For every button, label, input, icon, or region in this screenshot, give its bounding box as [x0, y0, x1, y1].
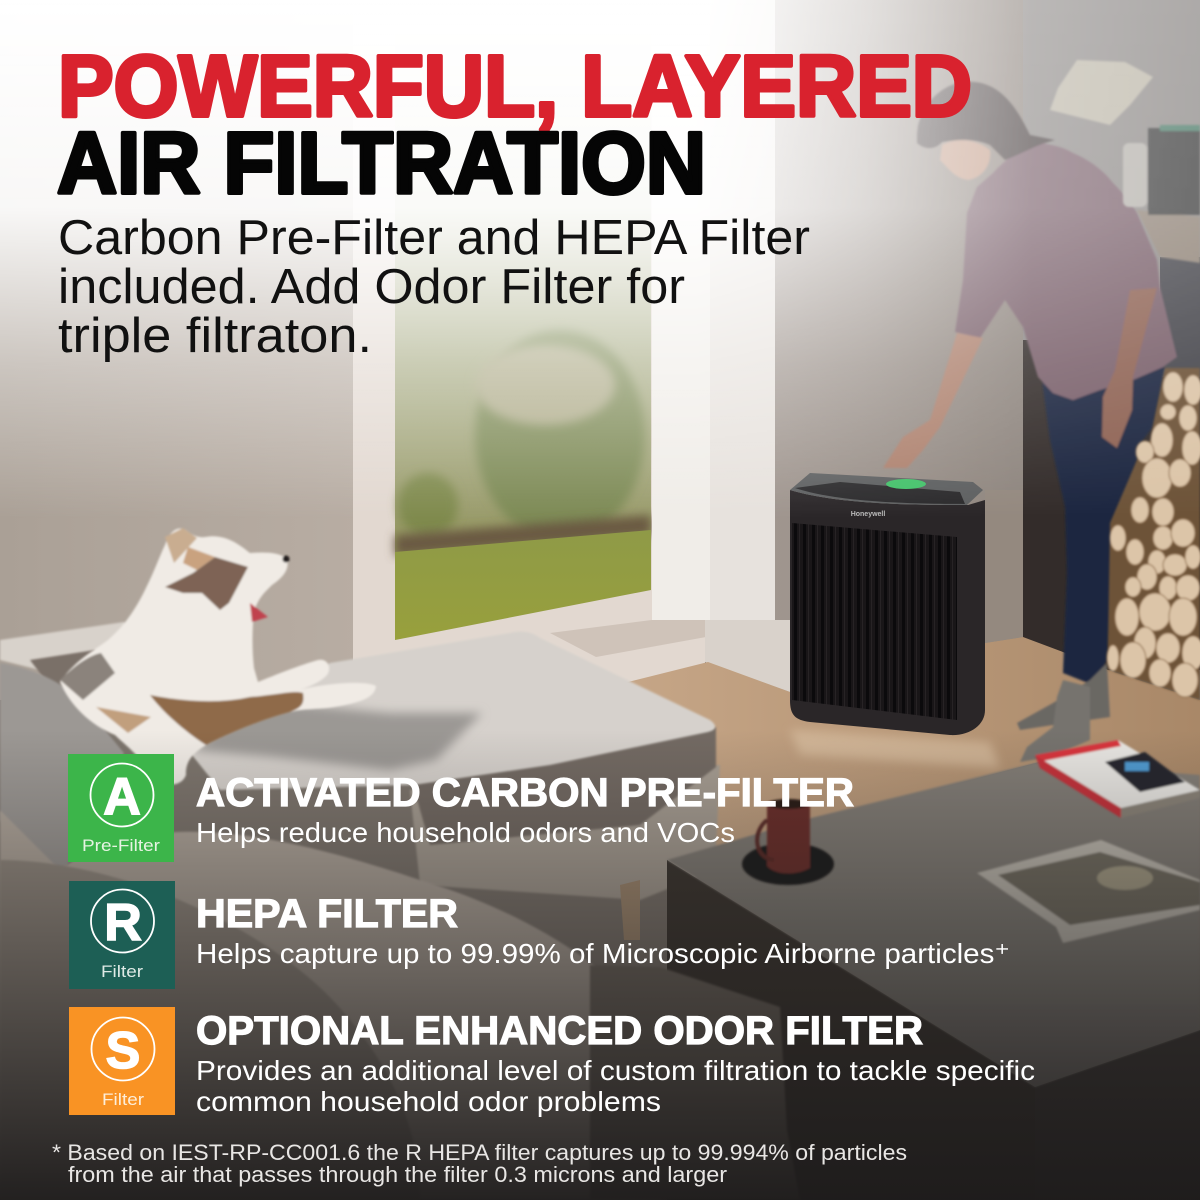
badge R: R: [104, 894, 142, 952]
title: [57, 38, 972, 212]
filter A row: [68, 754, 854, 862]
left pillow: [0, 663, 124, 880]
sofa and ottoman: [0, 622, 720, 1200]
heading R: HEPA FILTER: [196, 892, 458, 936]
coffee table: [590, 762, 1200, 1200]
mug and saucer: [742, 799, 834, 885]
heading A: ACTIVATED CARBON PRE-FILTER: [196, 771, 854, 815]
badge S: Filter: [102, 1090, 144, 1109]
badge A: A: [103, 768, 141, 826]
window and garden: [353, 0, 706, 700]
filter S row: [69, 1007, 1035, 1117]
hair: [917, 82, 1055, 160]
description S: [196, 1055, 1035, 1117]
footnote: * Based on IEST-RP-CC001.6 the R HEPA filter captures up to 99.994% of particles: [52, 1140, 907, 1165]
description A: Helps reduce household odors and VOCs: [196, 817, 735, 848]
footnote: [52, 1140, 907, 1187]
blanket: [0, 810, 660, 1200]
dog shadow: [193, 700, 482, 770]
wood floor: [620, 490, 1200, 860]
subtitle text: [58, 211, 810, 363]
badge S: S: [106, 1022, 140, 1080]
footnote: from the air that passes through the filter 0.3 microns and larger: [68, 1162, 727, 1187]
face: [940, 140, 990, 180]
ottoman top: [188, 632, 715, 790]
sweater: [955, 143, 1177, 400]
bottom dark fade: [0, 730, 1200, 1200]
ottoman side: [413, 727, 716, 845]
title: POWERFUL, LAYERED: [58, 38, 972, 135]
badge R: [69, 881, 175, 989]
dog: [60, 528, 376, 784]
subtitle text: Carbon Pre-Filter and HEPA Filter: [58, 211, 810, 265]
badge A: Pre-Filter: [82, 836, 160, 855]
red filter box on table: [1035, 740, 1200, 818]
main sofa seat: [410, 765, 720, 900]
subtitle text: triple filtraton.: [58, 309, 372, 363]
subtitle text: included. Add Odor Filter for: [58, 260, 685, 314]
badge S: [69, 1007, 175, 1115]
shelf decor: [1050, 60, 1200, 263]
air purifier: [790, 473, 985, 735]
air purifier: Honeywell: [851, 511, 885, 518]
magazine on table: [977, 840, 1200, 943]
description R: Helps capture up to 99.99% of Microscopic Airborne particles⁺: [196, 938, 1010, 969]
badge A: [68, 754, 174, 862]
back cushion: [0, 622, 160, 670]
socks: [1017, 663, 1110, 730]
title: AIR FILTRATION: [57, 115, 706, 212]
arms: [883, 333, 983, 468]
description S: common household odor problems: [196, 1086, 661, 1117]
woman: [883, 82, 1177, 762]
log pile: [1107, 368, 1200, 700]
legs: [1042, 367, 1165, 685]
filter R row: [69, 881, 1010, 989]
badge R: Filter: [101, 962, 143, 981]
heading S: OPTIONAL ENHANCED ODOR FILTER: [196, 1009, 923, 1053]
wall pillar: [652, 0, 790, 692]
top white fade: [0, 0, 1200, 520]
walls: [0, 0, 1200, 700]
description S: Provides an additional level of custom filtration to tackle specific: [196, 1055, 1035, 1086]
